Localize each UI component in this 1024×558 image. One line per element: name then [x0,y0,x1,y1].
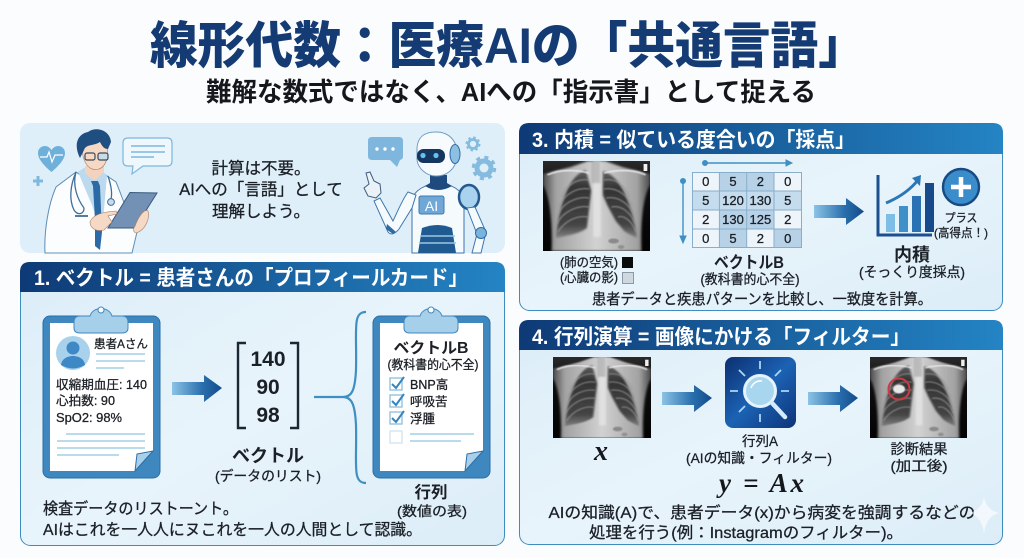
label: matrix: 行列 [414,483,448,502]
vector bracket: 90 [256,376,280,399]
matrix grid: 0 [702,231,709,246]
subtitle: 難解な数式ではなく、AIへの「指示書」として捉える [206,77,816,107]
label: vector [215,446,321,484]
icon: sparkle [969,497,999,534]
matrix grid: 5 [702,193,709,208]
label: vector: (データのリスト) [215,468,321,484]
heading: panel 3: 3. 内積 = 似ている度合いの「採点」 [532,129,855,152]
label: plus [934,211,988,240]
legend: x-ray: (肺の空気) [560,255,618,270]
clipboard: patient A: 患者Aさん [94,337,148,351]
arrow: to chart [814,198,864,225]
checklist: 呼吸苦 [410,395,448,409]
text: panel 4 description: 処理を行う(例：Instagramのフィルター)。 [589,524,903,542]
text: panel 1 description: 検査データのリストーント。 [43,499,238,518]
label: plus: プラス [944,211,978,225]
clipboard: patient A [43,307,160,478]
label: vector B: ベクトルB [714,253,784,272]
matrix grid: 0 [784,231,791,246]
matrix grid: 2 [757,174,764,189]
icon: robot speech bubble [368,137,403,167]
matrix grid: 120 [722,193,744,208]
x-ray image [543,161,650,251]
icon: robot [364,132,486,253]
clipboard: vector B: (教科書的心不全) [388,357,478,372]
icon: doctor [45,129,157,253]
text: intro message: 計算は不要。 [212,159,310,178]
legend: x-ray: (心臓の影) [560,270,618,285]
x-ray input [553,357,651,438]
icon: bar chart [878,175,934,235]
vector bracket: 98 [256,404,280,427]
heading: panel 4 [519,320,1003,350]
text: panel 4 description [548,503,976,542]
matrix grid: 2 [757,231,764,246]
checklist: BNP高 [410,377,448,392]
arrow: input to filter [662,385,712,412]
label: result [890,441,948,474]
label: matrix A: 行列A [742,434,778,449]
matrix grid: 0 [784,174,791,189]
matrix grid: 5 [784,193,791,208]
heading: panel 3 [519,123,1003,154]
panel: 3 dot product [519,123,1003,310]
clipboard: vector B [373,307,490,478]
matrix grid: 5 [729,174,737,189]
label: dot product: (そっくり度採点) [859,264,965,280]
matrix grid: 5 [729,231,737,246]
label: dot product: 内積 [894,245,930,265]
label: plus: (高得点！) [934,225,988,240]
checklist: 浮腫 [410,412,436,426]
title: 線形代数：医療AIの「共通言語」 [150,18,866,74]
legend: x-ray [560,255,634,285]
math: x: x [593,436,608,467]
label: result: 診断結果 [890,441,948,457]
icon: robot: AI [425,198,438,214]
text: patient data: SpO2: 98% [56,411,122,425]
heading: panel 1: 1. ベクトル = 患者さんの「プロフィールカード」 [34,267,468,290]
icon: magnifier filter [725,357,796,428]
panel: intro [20,123,505,253]
label: matrix A: (AIの知識・フィルター) [686,450,832,466]
label: vector B: (教科書的心不全) [700,272,800,287]
checklist [390,377,474,443]
matrix grid [692,172,802,248]
text: intro message [179,159,343,221]
panel: 1 vector [20,262,505,546]
matrix grid: 0 [702,174,709,189]
label: matrix A [686,434,832,466]
text: patient data [56,377,147,425]
text: intro message: AIへの「言語」として [179,180,343,199]
vector bracket [238,343,298,428]
matrix grid: 130 [722,212,744,227]
icon: plus [943,169,979,205]
label: result: (加工後) [890,458,948,474]
matrix grid: 130 [750,193,771,208]
label: vector B [700,253,800,287]
text: panel 1 description [43,499,422,539]
label: dot product [859,245,965,280]
text: panel 1 description: AIはこれを一人人にヌこれを一人の人間として認識。 [43,521,422,539]
text: patient data: 心拍数: 90 [56,393,115,408]
label: matrix: (数値の表) [397,504,467,519]
x-ray result [870,357,967,438]
label: matrix [397,483,467,519]
icon: gears [466,138,494,178]
arrow: filter to result [808,385,858,412]
heading: panel 4: 4. 行列演算 = 画像にかける「フィルター」 [532,326,910,349]
matrix grid: 2 [702,212,709,227]
icon: patient avatar [56,336,90,370]
icon: axis arrows [680,160,792,243]
label: vector: ベクトル [232,446,304,466]
brace [314,312,366,483]
math: y = Ax: y = Ax [716,468,804,498]
matrix grid: 2 [784,212,791,227]
text: panel 3 description: 患者データと疾患パターンを比較し、一致度を計算。 [592,290,932,308]
panel: 4 matrix operation [519,320,1003,544]
text: intro message: 理解しよう。 [212,202,310,221]
clipboard: vector B: ベクトルB [394,339,468,357]
text: panel 4 description: AIの知識(A)で、患者データ(x)から病変を強調するなどの [548,503,976,522]
icon: heart [33,146,65,186]
vector bracket: 140 [250,348,286,371]
arrow: data to vector [172,375,222,402]
text: patient data: 収縮期血圧: 140 [56,377,147,392]
icon: doctor speech bubble [123,138,172,174]
matrix grid: 125 [750,212,771,227]
